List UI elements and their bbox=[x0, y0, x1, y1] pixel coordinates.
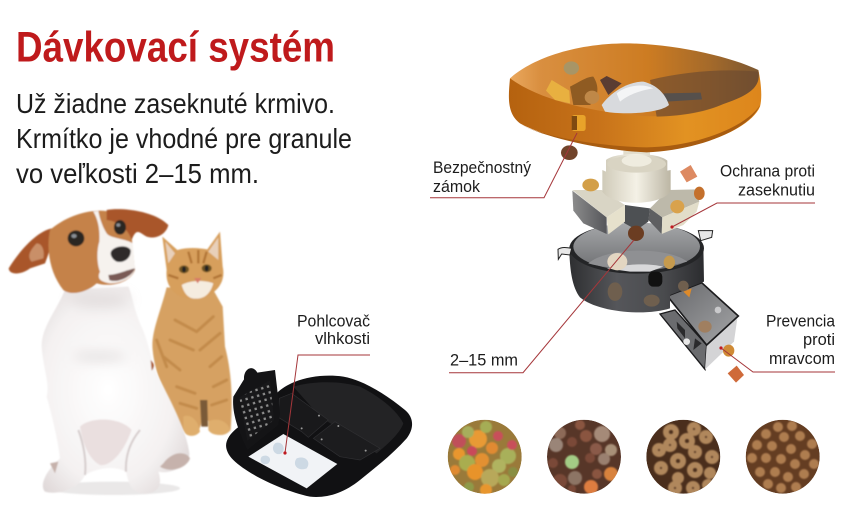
tray plates bbox=[278, 393, 380, 460]
label: safety lock: zámok bbox=[433, 177, 480, 196]
ant guard bbox=[660, 283, 738, 369]
intro text: Už žiadne zaseknuté krmivo. bbox=[16, 88, 335, 119]
feeder: pot with ant guard bbox=[558, 223, 744, 383]
label: moisture absorber: Pohlcovač bbox=[297, 312, 370, 330]
desiccant packet bbox=[248, 434, 337, 488]
feeder: anti-jam blades and column bbox=[561, 145, 705, 241]
label: safety lock bbox=[430, 133, 577, 198]
intro text: Krmítko je vhodné pre granule bbox=[16, 123, 352, 154]
label: ant prevention bbox=[719, 312, 835, 372]
cat photo bbox=[152, 232, 232, 436]
kibble sample: mixed brown bbox=[547, 420, 621, 494]
dog photo bbox=[9, 209, 190, 495]
label: jam protection: zaseknutiu bbox=[738, 180, 815, 200]
label: kibble size bbox=[449, 240, 634, 373]
filter lid bbox=[233, 368, 280, 450]
label: ant prevention: proti bbox=[803, 330, 835, 349]
label: safety lock: Bezpečnostný bbox=[433, 158, 531, 177]
moisture absorber tray bbox=[226, 368, 412, 497]
intro text bbox=[16, 88, 352, 189]
kibble sample: small brown bbox=[746, 420, 820, 494]
label: jam protection: Ochrana proti bbox=[720, 162, 815, 180]
label: moisture absorber bbox=[283, 312, 370, 455]
label: kibble size: 2–15 mm bbox=[450, 350, 518, 370]
label: moisture absorber: vlhkosti bbox=[315, 329, 370, 348]
feeder: orange hopper bbox=[509, 43, 761, 152]
title: Dávkovací systém bbox=[16, 24, 335, 72]
label: jam protection bbox=[670, 162, 815, 229]
label: ant prevention: Prevencia bbox=[766, 312, 835, 330]
kibble sample: ring shaped bbox=[646, 420, 720, 494]
intro text: vo veľkosti 2–15 mm. bbox=[16, 158, 259, 189]
label: ant prevention: mravcom bbox=[769, 349, 835, 368]
kibble sample: colourful bbox=[448, 420, 522, 496]
